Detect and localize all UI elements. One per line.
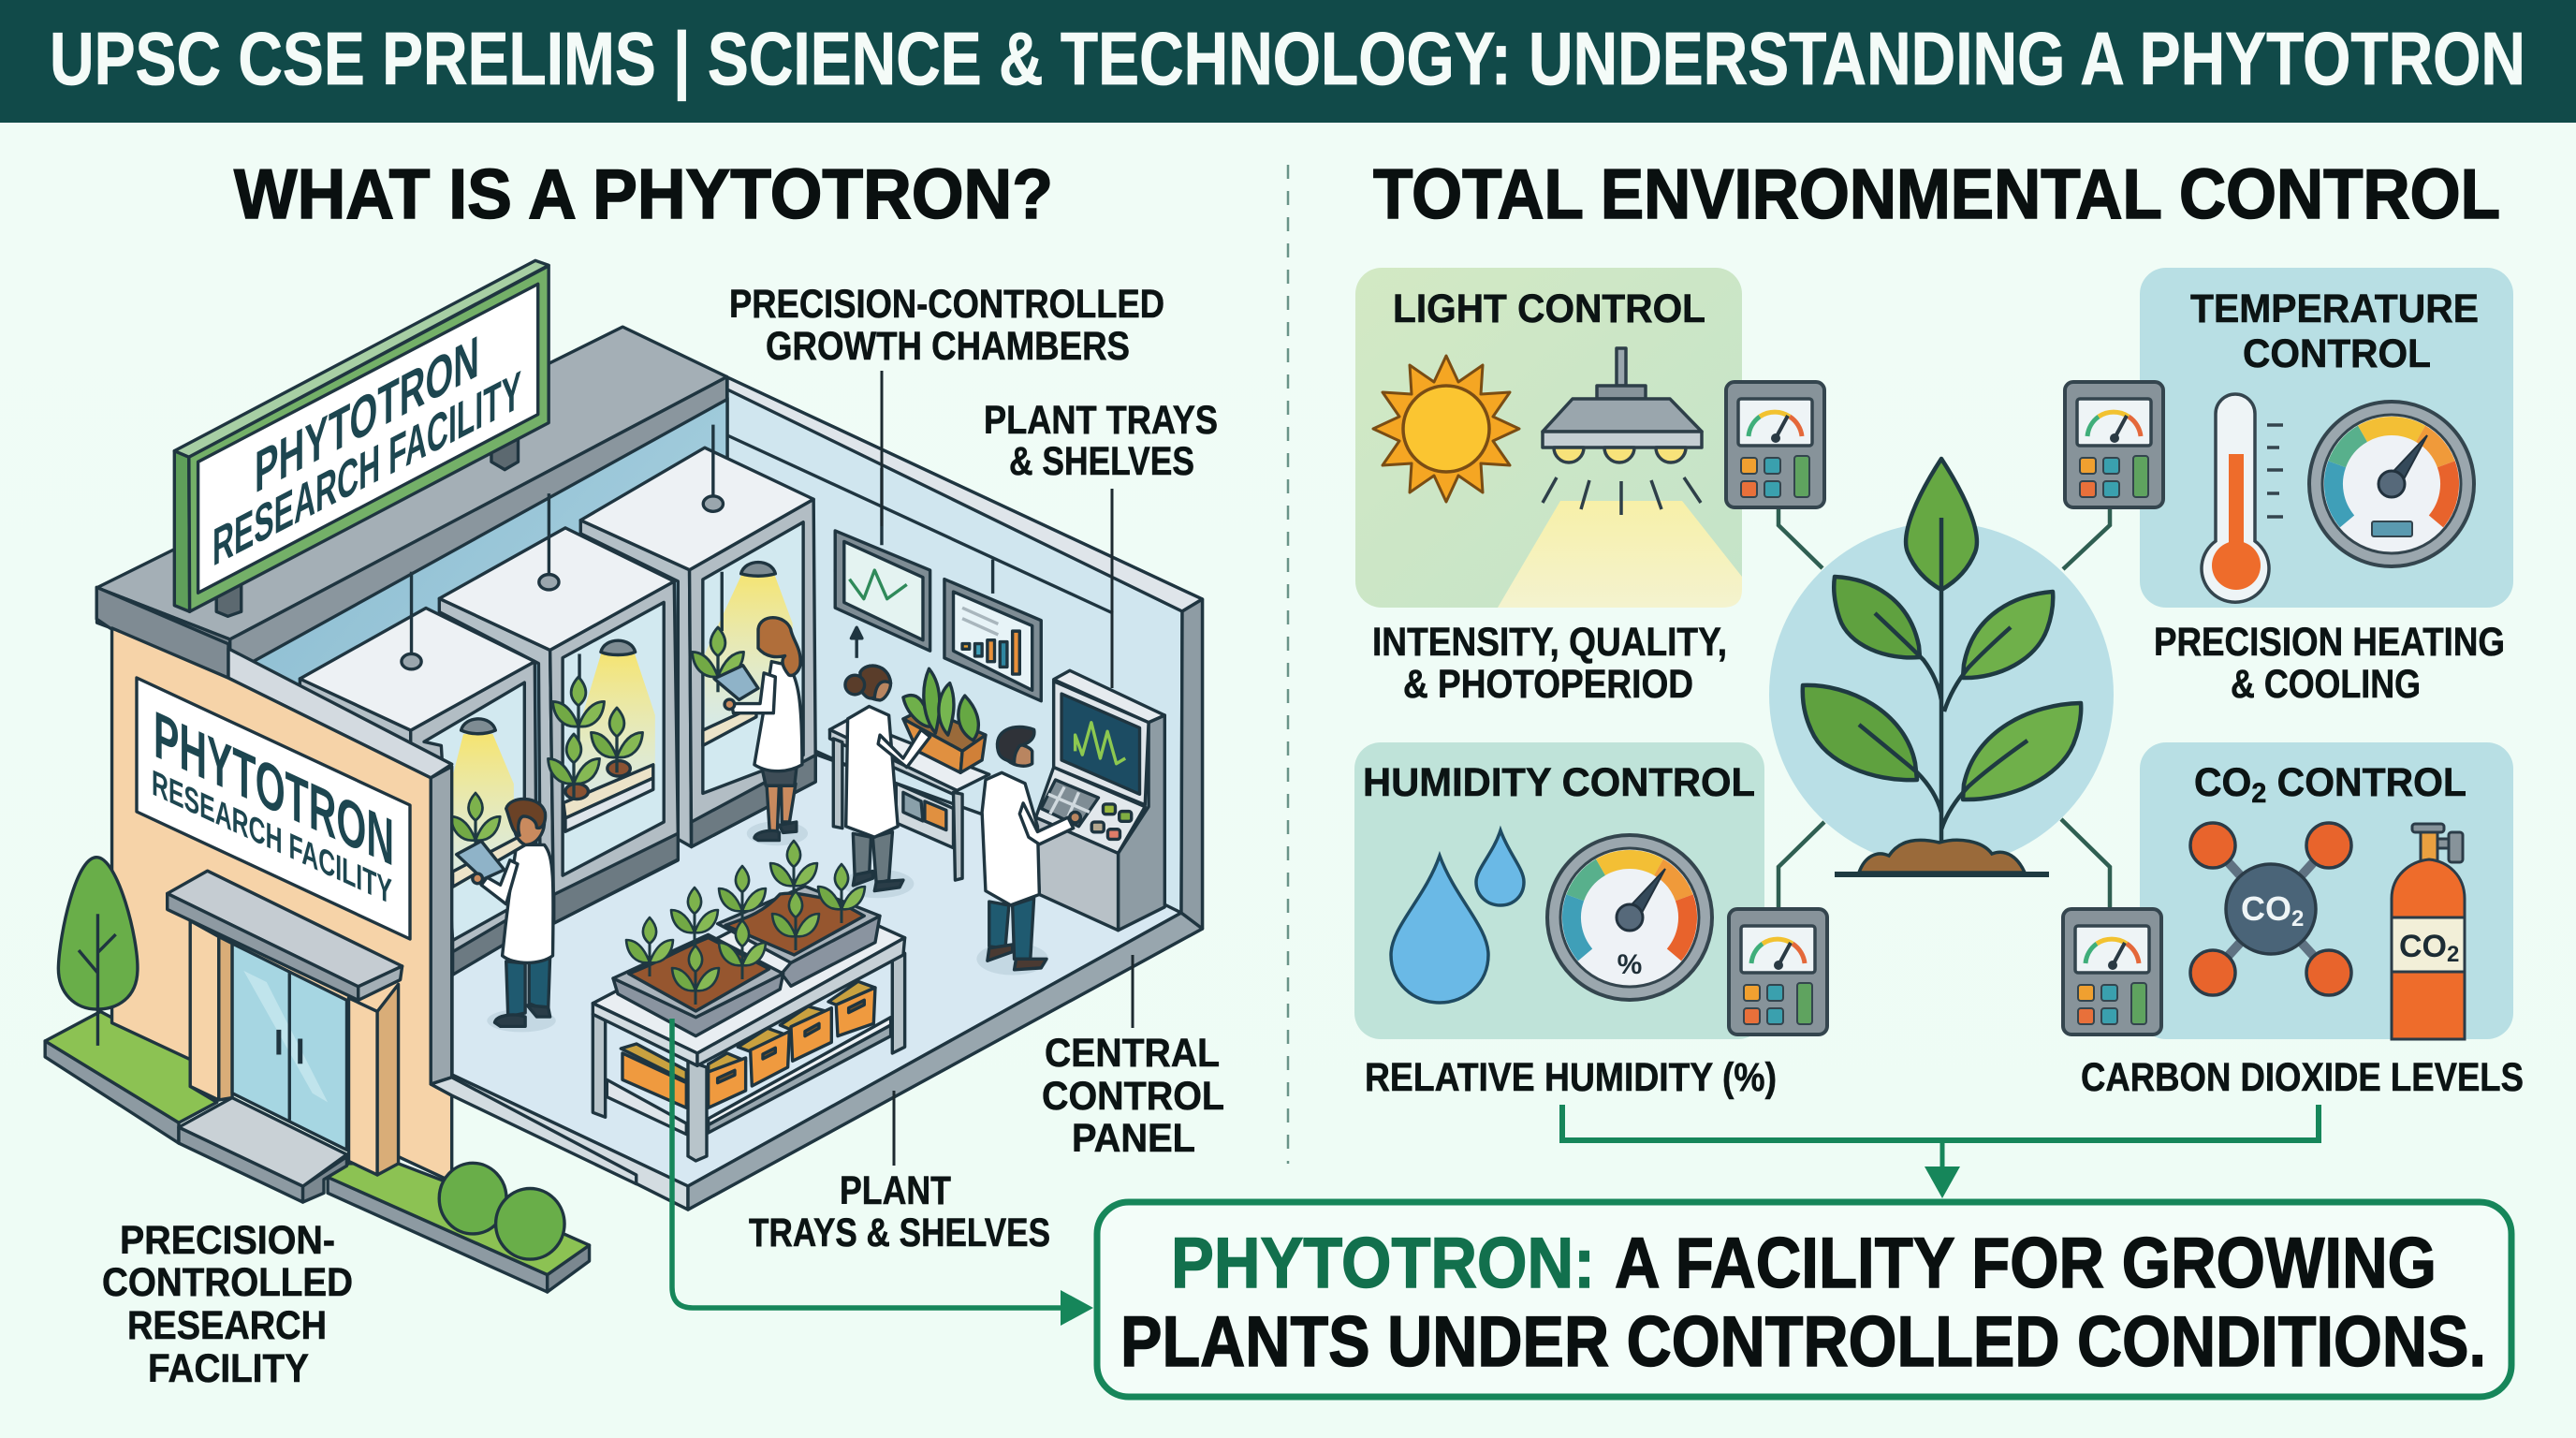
label: research facility	[102, 1218, 353, 1391]
header bar	[0, 0, 2576, 123]
caption: humidity: RELATIVE HUMIDITY (%)	[1365, 1055, 1777, 1100]
back plant table	[829, 668, 989, 880]
roof	[97, 327, 727, 674]
building front wall	[96, 587, 637, 1184]
definition text: PHYTOTRON:	[1171, 1224, 1595, 1303]
heading: what is a phytotron: WHAT IS A PHYTOTRON?	[234, 154, 1053, 233]
wall monitors	[835, 468, 1041, 701]
label: central control panel: CONTROL	[1042, 1074, 1224, 1119]
chamber plants	[451, 627, 743, 855]
label: research facility: FACILITY	[148, 1346, 309, 1391]
icon: sun	[1373, 356, 1519, 502]
scientist: with tablet	[457, 799, 556, 1032]
heading: 2	[2251, 778, 2266, 809]
scientist: at plant table	[842, 666, 930, 898]
scientist: at control panel	[976, 727, 1080, 976]
dashed divider	[1287, 165, 1289, 1164]
entrance	[168, 871, 402, 1202]
icon: CO2 cylinder: 2	[2447, 942, 2459, 967]
caption: light	[1372, 620, 1727, 707]
controller: CO2	[2063, 909, 2161, 1034]
grass left	[45, 1011, 217, 1143]
caption: temperature	[2154, 620, 2505, 707]
heading: CONTROL	[2266, 760, 2466, 805]
control panel	[1036, 670, 1164, 931]
definition text: A FACILITY FOR GROWING	[1615, 1224, 2437, 1303]
label: growth chambers	[729, 282, 1164, 526]
icon: humidity gauge	[1547, 835, 1712, 1000]
table top and legs	[593, 892, 905, 1161]
controller: humidity	[1729, 909, 1827, 1034]
panel: humidity control	[1354, 742, 1764, 1039]
controller: temperature	[2065, 382, 2163, 507]
green arrow to definition box	[672, 1019, 1093, 1326]
label: central control panel: PANEL	[1072, 1116, 1195, 1161]
grass right	[328, 1164, 590, 1292]
icon: CO2 molecule: CO	[2241, 889, 2291, 928]
growth chamber: back	[580, 425, 815, 847]
heading: TEMPERATURE	[2190, 286, 2479, 331]
light cone	[1498, 501, 1742, 608]
panel: temperature control: CONTROL	[2243, 331, 2431, 376]
soil	[1835, 840, 2049, 874]
label: plant trays and shelves lower: TRAYS & SHELVES	[749, 1211, 1050, 1255]
label: central control panel: CENTRAL	[1045, 1031, 1220, 1076]
bushes	[439, 1163, 564, 1259]
label: central control panel	[1042, 955, 1224, 1161]
label: plant trays and shelves lower	[749, 1091, 1050, 1255]
icon: CO2 molecule	[2190, 823, 2351, 995]
icon: CO2 cylinder: CO	[2399, 929, 2447, 964]
panel: light control	[1355, 268, 1742, 608]
illustration: phytotron research facility	[45, 260, 1202, 1292]
label: plant trays and shelves lower: PLANT	[840, 1168, 951, 1213]
label: plant trays and shelves upper: & SHELVES	[1009, 439, 1194, 484]
growth chamber: middle	[439, 493, 678, 923]
facility labels	[102, 282, 1224, 1391]
definition callout	[1097, 1202, 2511, 1397]
caption: light: & PHOTOPERIOD	[1403, 662, 1693, 707]
leaves and stem	[1803, 459, 2081, 843]
icon: humidity gauge: %	[1617, 949, 1642, 980]
heading: total environmental control: TOTAL ENVIRONMENTAL CONTROL	[1373, 154, 2500, 233]
room shell	[239, 377, 1202, 1210]
rooftop sign: RESEARCH FACILITY	[212, 359, 521, 578]
lower shelf	[607, 1018, 891, 1135]
front plant shelves	[593, 887, 905, 1161]
rooftop sign	[174, 260, 549, 616]
panel: temperature control	[2140, 268, 2513, 608]
bracket arrow to definition	[1562, 1105, 2319, 1198]
heading: LIGHT CONTROL	[1393, 286, 1705, 331]
label: research facility: RESEARCH	[127, 1303, 327, 1348]
heading: CO	[2194, 760, 2254, 805]
caption: temperature: & COOLING	[2231, 662, 2421, 707]
connectors	[1778, 507, 2110, 909]
wall sign: RESEARCH FACILITY	[152, 763, 392, 913]
label: plant trays and shelves upper	[984, 398, 1218, 688]
caption: light: INTENSITY, QUALITY,	[1372, 620, 1727, 665]
rooftop sign: PHYTOTRON	[255, 323, 479, 506]
icon: CO2 molecule: 2	[2291, 906, 2304, 932]
label: growth chambers: GROWTH CHAMBERS	[766, 324, 1130, 369]
storage boxes	[621, 981, 875, 1108]
label: research facility: PRECISION-	[120, 1218, 335, 1263]
icon: CO2 cylinder	[2392, 824, 2465, 1039]
growth chamber: front	[300, 572, 536, 975]
wall sign: PHYTOTRON	[154, 696, 394, 880]
icon: grow lamp	[1543, 348, 1702, 515]
plant backdrop circle	[1769, 522, 2114, 867]
scientist: woman at chamber	[714, 618, 808, 845]
central plant	[1769, 459, 2114, 909]
caption: temperature: PRECISION HEATING	[2154, 620, 2505, 665]
label: plant trays and shelves upper: PLANT TRAYS	[984, 398, 1218, 443]
tray sprouts	[626, 841, 865, 1005]
trays	[613, 887, 880, 1036]
label: research facility: CONTROLLED	[102, 1260, 353, 1305]
icon: thermometer	[2202, 394, 2283, 602]
tree	[58, 858, 138, 1046]
heading: HUMIDITY CONTROL	[1363, 760, 1755, 805]
icon: temperature gauge	[2309, 402, 2474, 566]
controller: light	[1726, 382, 1824, 507]
panel: CO2 control	[2140, 742, 2513, 1039]
label: growth chambers: PRECISION-CONTROLLED	[729, 282, 1164, 327]
definition text	[1120, 1224, 2486, 1382]
icon: water drops	[1391, 830, 1524, 1003]
wall sign	[137, 678, 410, 939]
